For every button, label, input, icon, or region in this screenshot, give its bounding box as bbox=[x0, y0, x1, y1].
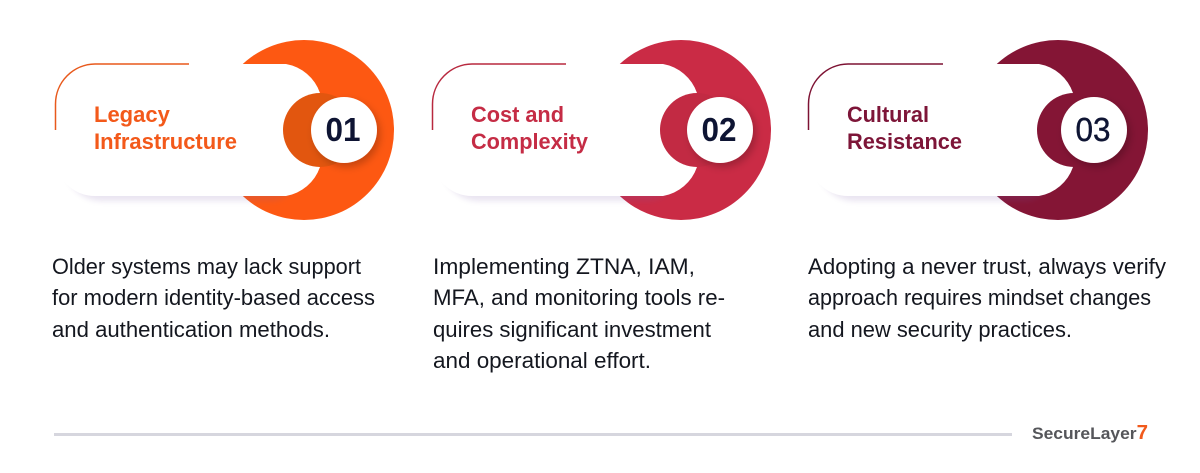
description: Implementing ZTNA, IAM, bbox=[433, 254, 695, 279]
number badge bbox=[1061, 97, 1127, 163]
number badge bbox=[687, 97, 753, 163]
description: Older systems may lack support bbox=[52, 254, 361, 279]
card shadow bbox=[443, 120, 677, 201]
heading: Resistance bbox=[847, 129, 962, 154]
panel: cultural resistance bbox=[808, 40, 1166, 342]
card accent line bbox=[432, 64, 566, 130]
icon: maroon ring bbox=[968, 40, 1148, 220]
panel: legacy infrastructure bbox=[52, 40, 394, 342]
inner dark circle bbox=[283, 93, 357, 167]
heading: Legacy bbox=[94, 102, 171, 127]
logo: SecureLayer7: SecureLayer7 bbox=[1032, 422, 1148, 444]
card accent line bbox=[56, 64, 189, 130]
icon: orange ring bbox=[214, 40, 394, 220]
description: MFA, and monitoring tools re- bbox=[433, 285, 725, 310]
card shadow bbox=[819, 120, 1053, 201]
description: and operational effort. bbox=[433, 348, 651, 373]
description: approach requires mindset changes bbox=[808, 285, 1151, 310]
white card bbox=[432, 64, 697, 196]
heading: Infrastructure bbox=[94, 129, 237, 154]
heading: Complexity bbox=[471, 129, 589, 154]
icon: red ring bbox=[591, 40, 771, 220]
heading: Cultural bbox=[847, 102, 929, 127]
white card bbox=[808, 64, 1073, 196]
inner dark circle bbox=[1037, 93, 1111, 167]
number badge: 03 bbox=[1076, 111, 1110, 148]
description: for modern identity-based access bbox=[52, 285, 375, 310]
footer rule bbox=[54, 433, 1012, 436]
description: quires significant investment bbox=[433, 317, 711, 342]
white card bbox=[55, 64, 320, 196]
panel: cost and complexity bbox=[432, 40, 771, 373]
number badge: 01 bbox=[326, 111, 360, 148]
card shadow bbox=[66, 120, 300, 201]
description: and new security practices. bbox=[808, 317, 1072, 342]
description: Adopting a never trust, always verify bbox=[808, 254, 1166, 279]
description: and authentication methods. bbox=[52, 317, 330, 342]
inner dark circle bbox=[660, 93, 734, 167]
card accent line bbox=[808, 64, 943, 130]
number badge: 02 bbox=[702, 111, 736, 148]
heading: Cost and bbox=[471, 102, 564, 127]
number badge bbox=[311, 97, 377, 163]
